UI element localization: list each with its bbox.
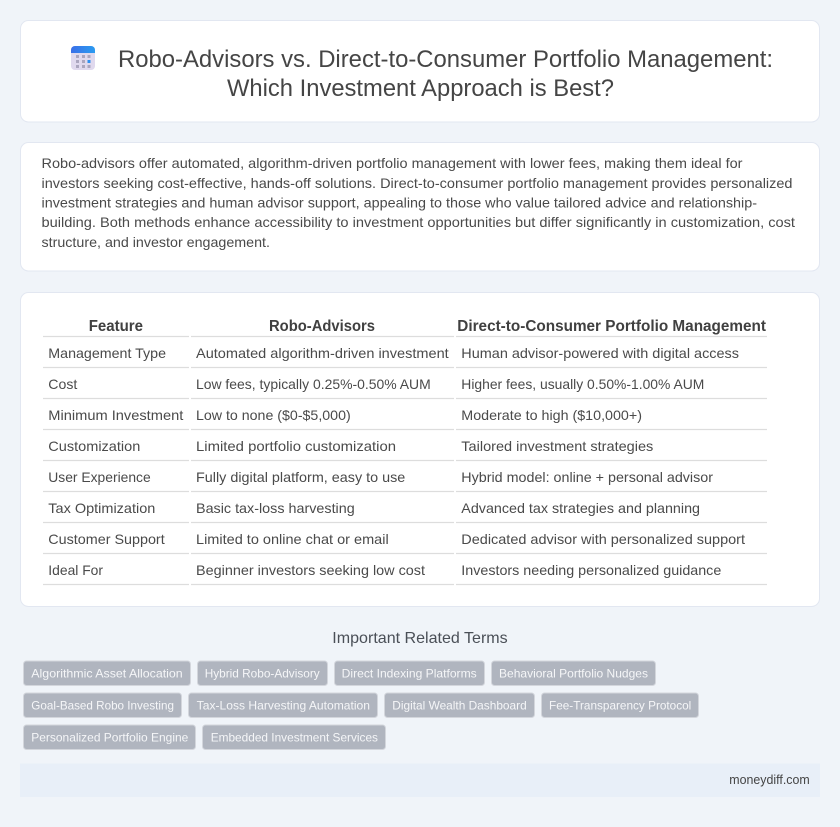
row: management type: Automated algorithm-driven investment [196, 345, 449, 361]
heading: important related terms: Important Related Terms [332, 630, 508, 647]
tag: Goal-Based Robo Investing [31, 698, 174, 712]
tag [24, 693, 182, 718]
summary text block: Robo-advisors offer automated, algorithm-driven portfolio management with lower fees, making them ideal for [42, 155, 743, 171]
footer bar: moneydiff.com [729, 773, 810, 787]
table header row [89, 318, 766, 335]
row: minimum investment: Minimum Investment [48, 407, 183, 423]
tag: Fee-Transparency Protocol [549, 698, 691, 712]
tag: Direct Indexing Platforms [342, 666, 477, 680]
summary text block: investors seeking cost-effective, hands-off solutions. Direct-to-consumer portfolio management provides personalized [42, 175, 792, 191]
row: user experience: Hybrid model: online + personal advisor [461, 469, 713, 485]
panel: title card [20, 20, 820, 122]
row: cost [48, 376, 704, 392]
tag [334, 661, 484, 686]
row: management type: Human advisor-powered with digital access [461, 345, 739, 361]
row: tax optimization: Basic tax-loss harvesting [196, 500, 355, 516]
row: customization: Customization [48, 438, 140, 454]
tag [188, 693, 378, 718]
row: tax optimization: Advanced tax strategies and planning [461, 500, 700, 516]
tag: Tax-Loss Harvesting Automation [197, 698, 370, 712]
row: minimum investment: Low to none ($0-$5,000) [196, 407, 351, 423]
row: management type [48, 345, 739, 361]
summary text block: structure, and investor engagement. [42, 234, 270, 250]
row: ideal for [48, 562, 722, 578]
tag [198, 661, 328, 686]
tag [24, 661, 190, 686]
row: tax optimization [48, 500, 700, 516]
row: ideal for: Investors needing personalized guidance [461, 562, 722, 578]
summary text block: building. Both methods enhance accessibility to investment opportunities but differ significantly in customization, cost [42, 214, 795, 230]
row: user experience: User Experience [48, 469, 151, 485]
tag [202, 725, 386, 750]
table header row: Robo-Advisors [269, 318, 375, 335]
row: customer support [48, 531, 745, 547]
row: minimum investment [48, 407, 642, 423]
tag [542, 693, 698, 718]
tag: Digital Wealth Dashboard [392, 698, 527, 712]
tag [492, 661, 656, 686]
row: minimum investment: Moderate to high ($10,000+) [461, 407, 642, 423]
title [118, 46, 773, 102]
tag: Personalized Portfolio Engine [31, 730, 189, 744]
tag: Algorithmic Asset Allocation [31, 666, 183, 680]
row: customer support: Dedicated advisor with personalized support [461, 531, 745, 547]
tag list [24, 661, 698, 750]
row: customer support: Limited to online chat or email [196, 531, 389, 547]
summary text block: investment strategies and human advisor support, appealing to those who value tailored advice and relationship- [42, 194, 757, 210]
title: Robo-Advisors vs. Direct-to-Consumer Portfolio Management: [118, 46, 773, 73]
footer bar [20, 764, 820, 797]
row: management type: Management Type [48, 345, 166, 361]
panel: summary [20, 142, 820, 271]
tag: Hybrid Robo-Advisory [205, 666, 320, 680]
tag: Behavioral Portfolio Nudges [499, 666, 648, 680]
row: cost: Higher fees, usually 0.50%-1.00% AUM [461, 376, 704, 392]
row: cost: Cost [48, 376, 77, 392]
row: user experience [48, 469, 713, 485]
tag [24, 725, 196, 750]
title: Which Investment Approach is Best? [227, 75, 614, 102]
row: ideal for: Ideal For [48, 562, 103, 578]
row: customization [48, 438, 653, 454]
summary text block [42, 155, 795, 250]
row: customization: Limited portfolio customization [196, 438, 396, 454]
icon: calendar [71, 46, 95, 70]
row: tax optimization: Tax Optimization [48, 500, 155, 516]
row: user experience: Fully digital platform, easy to use [196, 469, 406, 485]
row: customization: Tailored investment strategies [461, 438, 653, 454]
table header row: Feature [89, 318, 143, 335]
row: cost: Low fees, typically 0.25%-0.50% AUM [196, 376, 431, 392]
tag [384, 693, 534, 718]
table header row: Direct-to-Consumer Portfolio Management [457, 318, 766, 335]
row: ideal for: Beginner investors seeking low cost [196, 562, 425, 578]
tag: Embedded Investment Services [211, 730, 378, 744]
row: customer support: Customer Support [48, 531, 165, 547]
panel: comparison table [20, 292, 820, 606]
